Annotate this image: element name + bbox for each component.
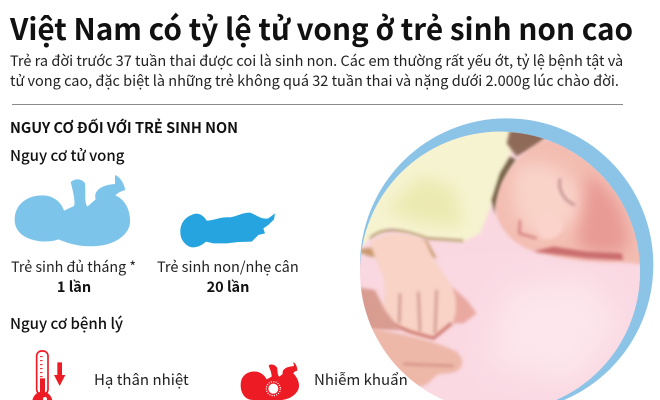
title: Việt Nam có tỷ lệ tử vong ở trẻ sinh non cao [10, 6, 633, 49]
intro text: Trẻ ra đời trước 37 tuần thai được coi là sinh non. Các em thường rất yếu ớt, tỷ lệ bệnh tật và [10, 50, 623, 71]
blanket shadow beside hand [452, 287, 477, 323]
label: infection: Nhiễm khuẩn [314, 369, 408, 390]
icon: thermometer with arrow [32, 351, 65, 400]
icon: full-term baby silhouette [15, 175, 130, 246]
label: full-term baby: Trẻ sinh đủ tháng * [11, 256, 136, 277]
blanket highlights [428, 268, 640, 400]
adult hand [361, 286, 400, 332]
value: 1 time: 1 lần [57, 276, 91, 297]
face [494, 138, 640, 266]
icon: preterm baby silhouette [180, 213, 275, 247]
intro text: tử vong cao, đặc biệt là những trẻ không quá 32 tuần thai và nặng dưới 2.000g lúc chào đời. [10, 70, 619, 91]
subheading: disease risk: Nguy cơ bệnh lý [10, 313, 123, 334]
cloth [362, 132, 514, 246]
hair and neck shadow [504, 132, 546, 158]
value: 20 times: 20 lần [207, 276, 249, 297]
label: hypothermia: Hạ thân nhiệt [94, 369, 189, 390]
baby arm and hand [370, 234, 456, 338]
photo: sleeping newborn in blue ring [353, 118, 653, 400]
subheading: death risk: Nguy cơ tử vong [10, 145, 124, 166]
icon: baby with germ [241, 362, 299, 400]
label: preterm baby: Trẻ sinh non/nhẹ cân [157, 256, 299, 277]
section heading: NGUY CƠ ĐỐI VỚI TRẺ SINH NON [10, 117, 238, 138]
intro text [10, 50, 623, 91]
